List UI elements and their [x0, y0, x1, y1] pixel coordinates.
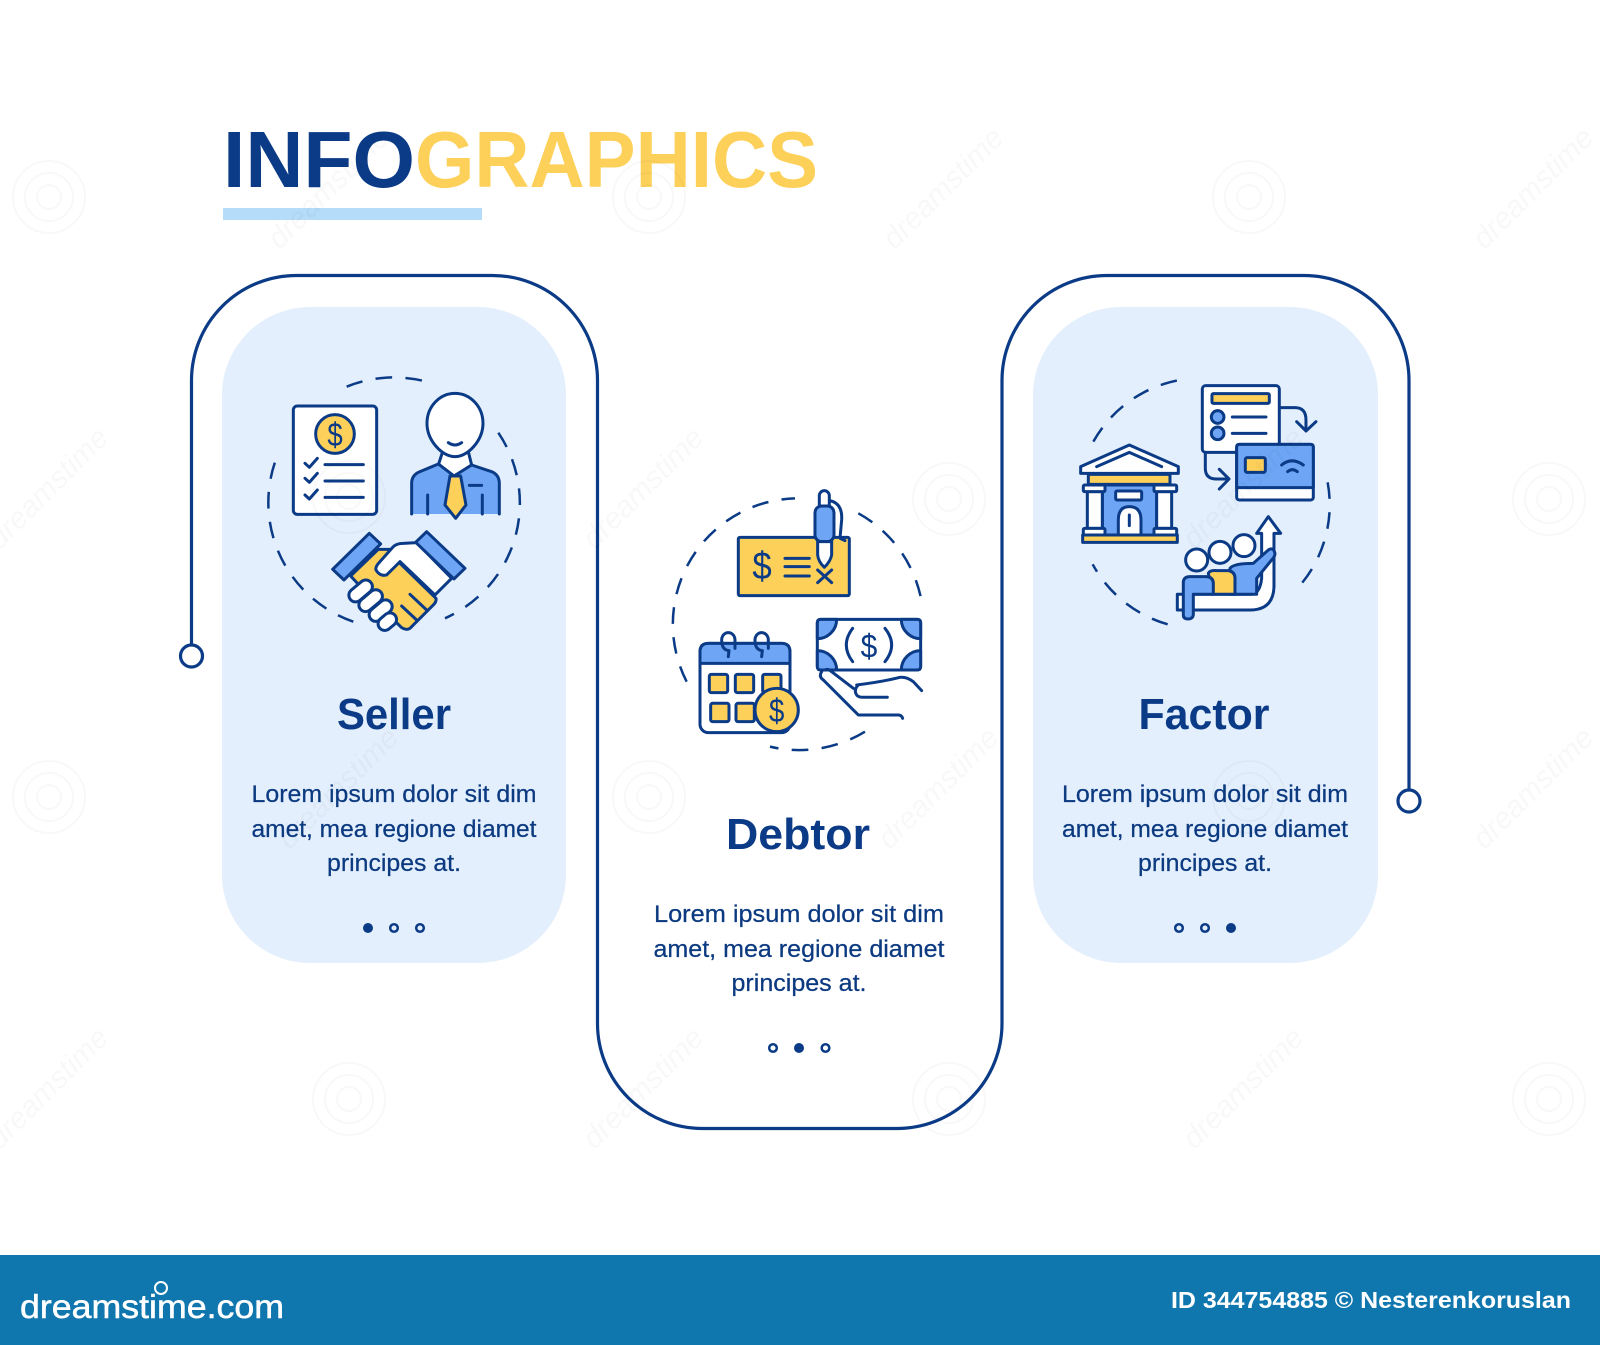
watermark rings [13, 161, 1585, 1135]
title [223, 115, 818, 204]
card: seller text: Lorem ipsum dolor sit dim [252, 781, 536, 808]
card: seller text: Seller [337, 690, 451, 739]
watermark text: dreamstime [261, 121, 395, 255]
icon: seller, invoice, person and handshake [268, 377, 520, 633]
pagination dots: seller [363, 923, 424, 933]
watermark text: dreamstime [1176, 1021, 1310, 1155]
icon: seller, invoice, person and handshake: $ [327, 417, 343, 454]
icon: debtor, cheque, calendar and banknote: $ [769, 693, 784, 730]
panel: seller background [222, 307, 566, 963]
footer band [0, 1255, 1600, 1345]
card: factor text: Factor [1138, 690, 1270, 739]
watermark text: dreamstime [871, 721, 1005, 855]
card: factor text: principes at. [1138, 850, 1272, 877]
title: GRAPHICS [415, 115, 818, 204]
footer logo: dreamstime.com [20, 1288, 284, 1325]
title underline [223, 208, 482, 220]
title: INFO [223, 115, 415, 204]
watermark text: dreamstime [1466, 121, 1600, 255]
icon: debtor, cheque, calendar and banknote [673, 491, 922, 750]
card: debtor text [654, 810, 945, 997]
icon: factor, bank, document, card and people [1081, 379, 1330, 624]
footer credit: ID 344754885 © Nesterenkoruslan [1171, 1287, 1571, 1313]
card: debtor text: Lorem ipsum dolor sit dim [654, 901, 944, 928]
continuous outline connecting the three cards [180, 276, 1420, 1128]
card: factor text: amet, mea regione diamet [1062, 816, 1348, 843]
card: seller text: principes at. [327, 850, 461, 877]
watermark text: dreamstime [1176, 421, 1310, 555]
pagination dots: debtor [769, 1043, 829, 1053]
card: factor text: Lorem ipsum dolor sit dim [1062, 781, 1348, 808]
watermark text: dreamstime [576, 1021, 710, 1155]
card: seller text [252, 690, 537, 877]
card: factor text [1062, 690, 1348, 877]
card: debtor text: Debtor [726, 810, 870, 859]
pagination dots: factor [1175, 923, 1236, 933]
watermark text [0, 121, 1600, 1155]
card: debtor text: amet, mea regione diamet [654, 936, 945, 963]
icon: debtor, cheque, calendar and banknote: $ [861, 628, 877, 665]
watermark text: dreamstime [576, 421, 710, 555]
panel: factor background [1033, 307, 1378, 963]
card: debtor text: principes at. [732, 970, 866, 997]
footer logo swirl [155, 1282, 167, 1294]
watermark text: dreamstime [271, 721, 405, 855]
watermark text: dreamstime [876, 121, 1010, 255]
card: seller text: amet, mea regione diamet [252, 816, 537, 843]
icon: debtor, cheque, calendar and banknote: $ [752, 544, 772, 588]
watermark text: dreamstime [1466, 721, 1600, 855]
